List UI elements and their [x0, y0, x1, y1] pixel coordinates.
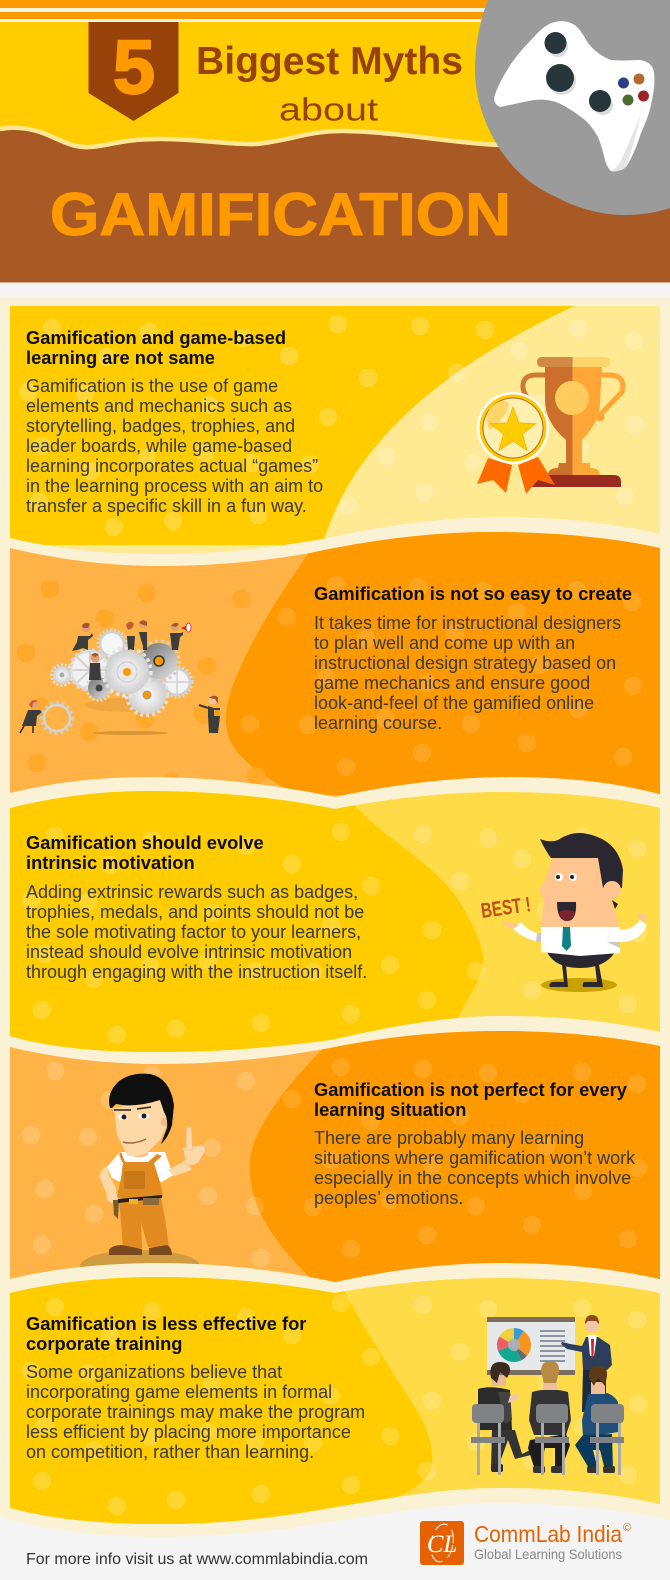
copyright mark: © — [623, 1522, 631, 1534]
panel: myth 2 — [10, 520, 670, 800]
body text: It takes time for instructional designers — [314, 613, 621, 633]
icon: CommLab logo: CL — [427, 1531, 457, 1558]
body text: leader boards, while game-based — [26, 436, 292, 456]
header banner — [0, 0, 670, 283]
heading: Gamification is not so easy to create — [314, 583, 632, 604]
title: GAMIFICATION: GAMIFICATION — [50, 181, 511, 248]
text: BEST: BEST ! — [479, 893, 532, 923]
heading: learning are not same — [26, 347, 215, 368]
body text: learning incorporates actual “games” — [26, 456, 318, 476]
body text: game mechanics and ensure good — [314, 673, 590, 693]
panel: myth 1 — [0, 300, 660, 554]
title: Biggest Myths: Biggest Myths — [196, 40, 463, 83]
body text: storytelling, badges, trophies, and — [26, 416, 295, 436]
body text: instructional design strategy based on — [314, 653, 616, 673]
body text: look-and-feel of the gamified online — [314, 693, 594, 713]
brand name: CommLab India — [474, 1521, 622, 1547]
body text: Some organizations believe that — [26, 1362, 282, 1382]
ground shadow — [80, 1250, 200, 1267]
icon: worker in overalls pointing up — [100, 1074, 205, 1255]
body text: on competition, rather than learning. — [26, 1442, 314, 1462]
icon: grey circle with game controller — [475, 0, 670, 215]
tagline: Global Learning Solutions — [474, 1546, 622, 1562]
body text: through engaging with the instruction itself. — [26, 962, 367, 982]
body text: especially in the concepts which involve — [314, 1168, 631, 1188]
title: about: about — [279, 92, 378, 128]
body text: There are probably many learning — [314, 1128, 584, 1148]
heading: learning situation — [314, 1099, 466, 1120]
icon: presenter and audience — [471, 1315, 624, 1475]
heading: Gamification is not perfect for every — [314, 1079, 628, 1100]
body text: learning course. — [314, 713, 442, 733]
heading: Gamification is less effective for — [26, 1313, 306, 1334]
body text: instead should evolve intrinsic motivation — [26, 942, 352, 962]
cream content background — [0, 297, 670, 1537]
body text: situations where gamification won’t work — [314, 1148, 636, 1168]
body text: the sole motivating factor to your learners, — [26, 922, 361, 942]
icon: CommLab logo — [420, 1521, 464, 1565]
heading: corporate training — [26, 1333, 182, 1354]
body text: in the learning process with an aim to — [26, 476, 323, 496]
body text: peoples’ emotions. — [314, 1188, 463, 1208]
footer — [26, 1521, 631, 1568]
heading: Gamification and game-based — [26, 327, 286, 348]
icon: gears and business people — [20, 620, 220, 735]
body text: corporate trainings may make the program — [26, 1402, 365, 1422]
icon: cartoon man saying BEST — [479, 833, 647, 992]
body text: transfer a specific skill in a fun way. — [26, 496, 307, 516]
panel: myth 3 — [0, 780, 660, 1060]
body text: Adding extrinsic rewards such as badges, — [26, 882, 358, 902]
body text: to plan well and come up with an — [314, 633, 575, 653]
body text: Gamification is the use of game — [26, 376, 278, 396]
heading: Gamification should evolve — [26, 832, 264, 853]
icon: number badge: 5 — [113, 26, 155, 110]
body text: less efficient by placing more importance — [26, 1422, 351, 1442]
panel: myth 4 — [10, 1031, 660, 1282]
heading: intrinsic motivation — [26, 852, 195, 873]
footer link text: For more info visit us at www.commlabindia.com — [26, 1551, 368, 1568]
icon: number badge — [88, 22, 178, 121]
icon: trophy and medal — [477, 357, 623, 494]
body text: elements and mechanics such as — [26, 396, 292, 416]
body text: trophies, medals, and points should not be — [26, 902, 364, 922]
panel: myth 5 — [0, 1270, 660, 1530]
body text: incorporating game elements in formal — [26, 1382, 332, 1402]
